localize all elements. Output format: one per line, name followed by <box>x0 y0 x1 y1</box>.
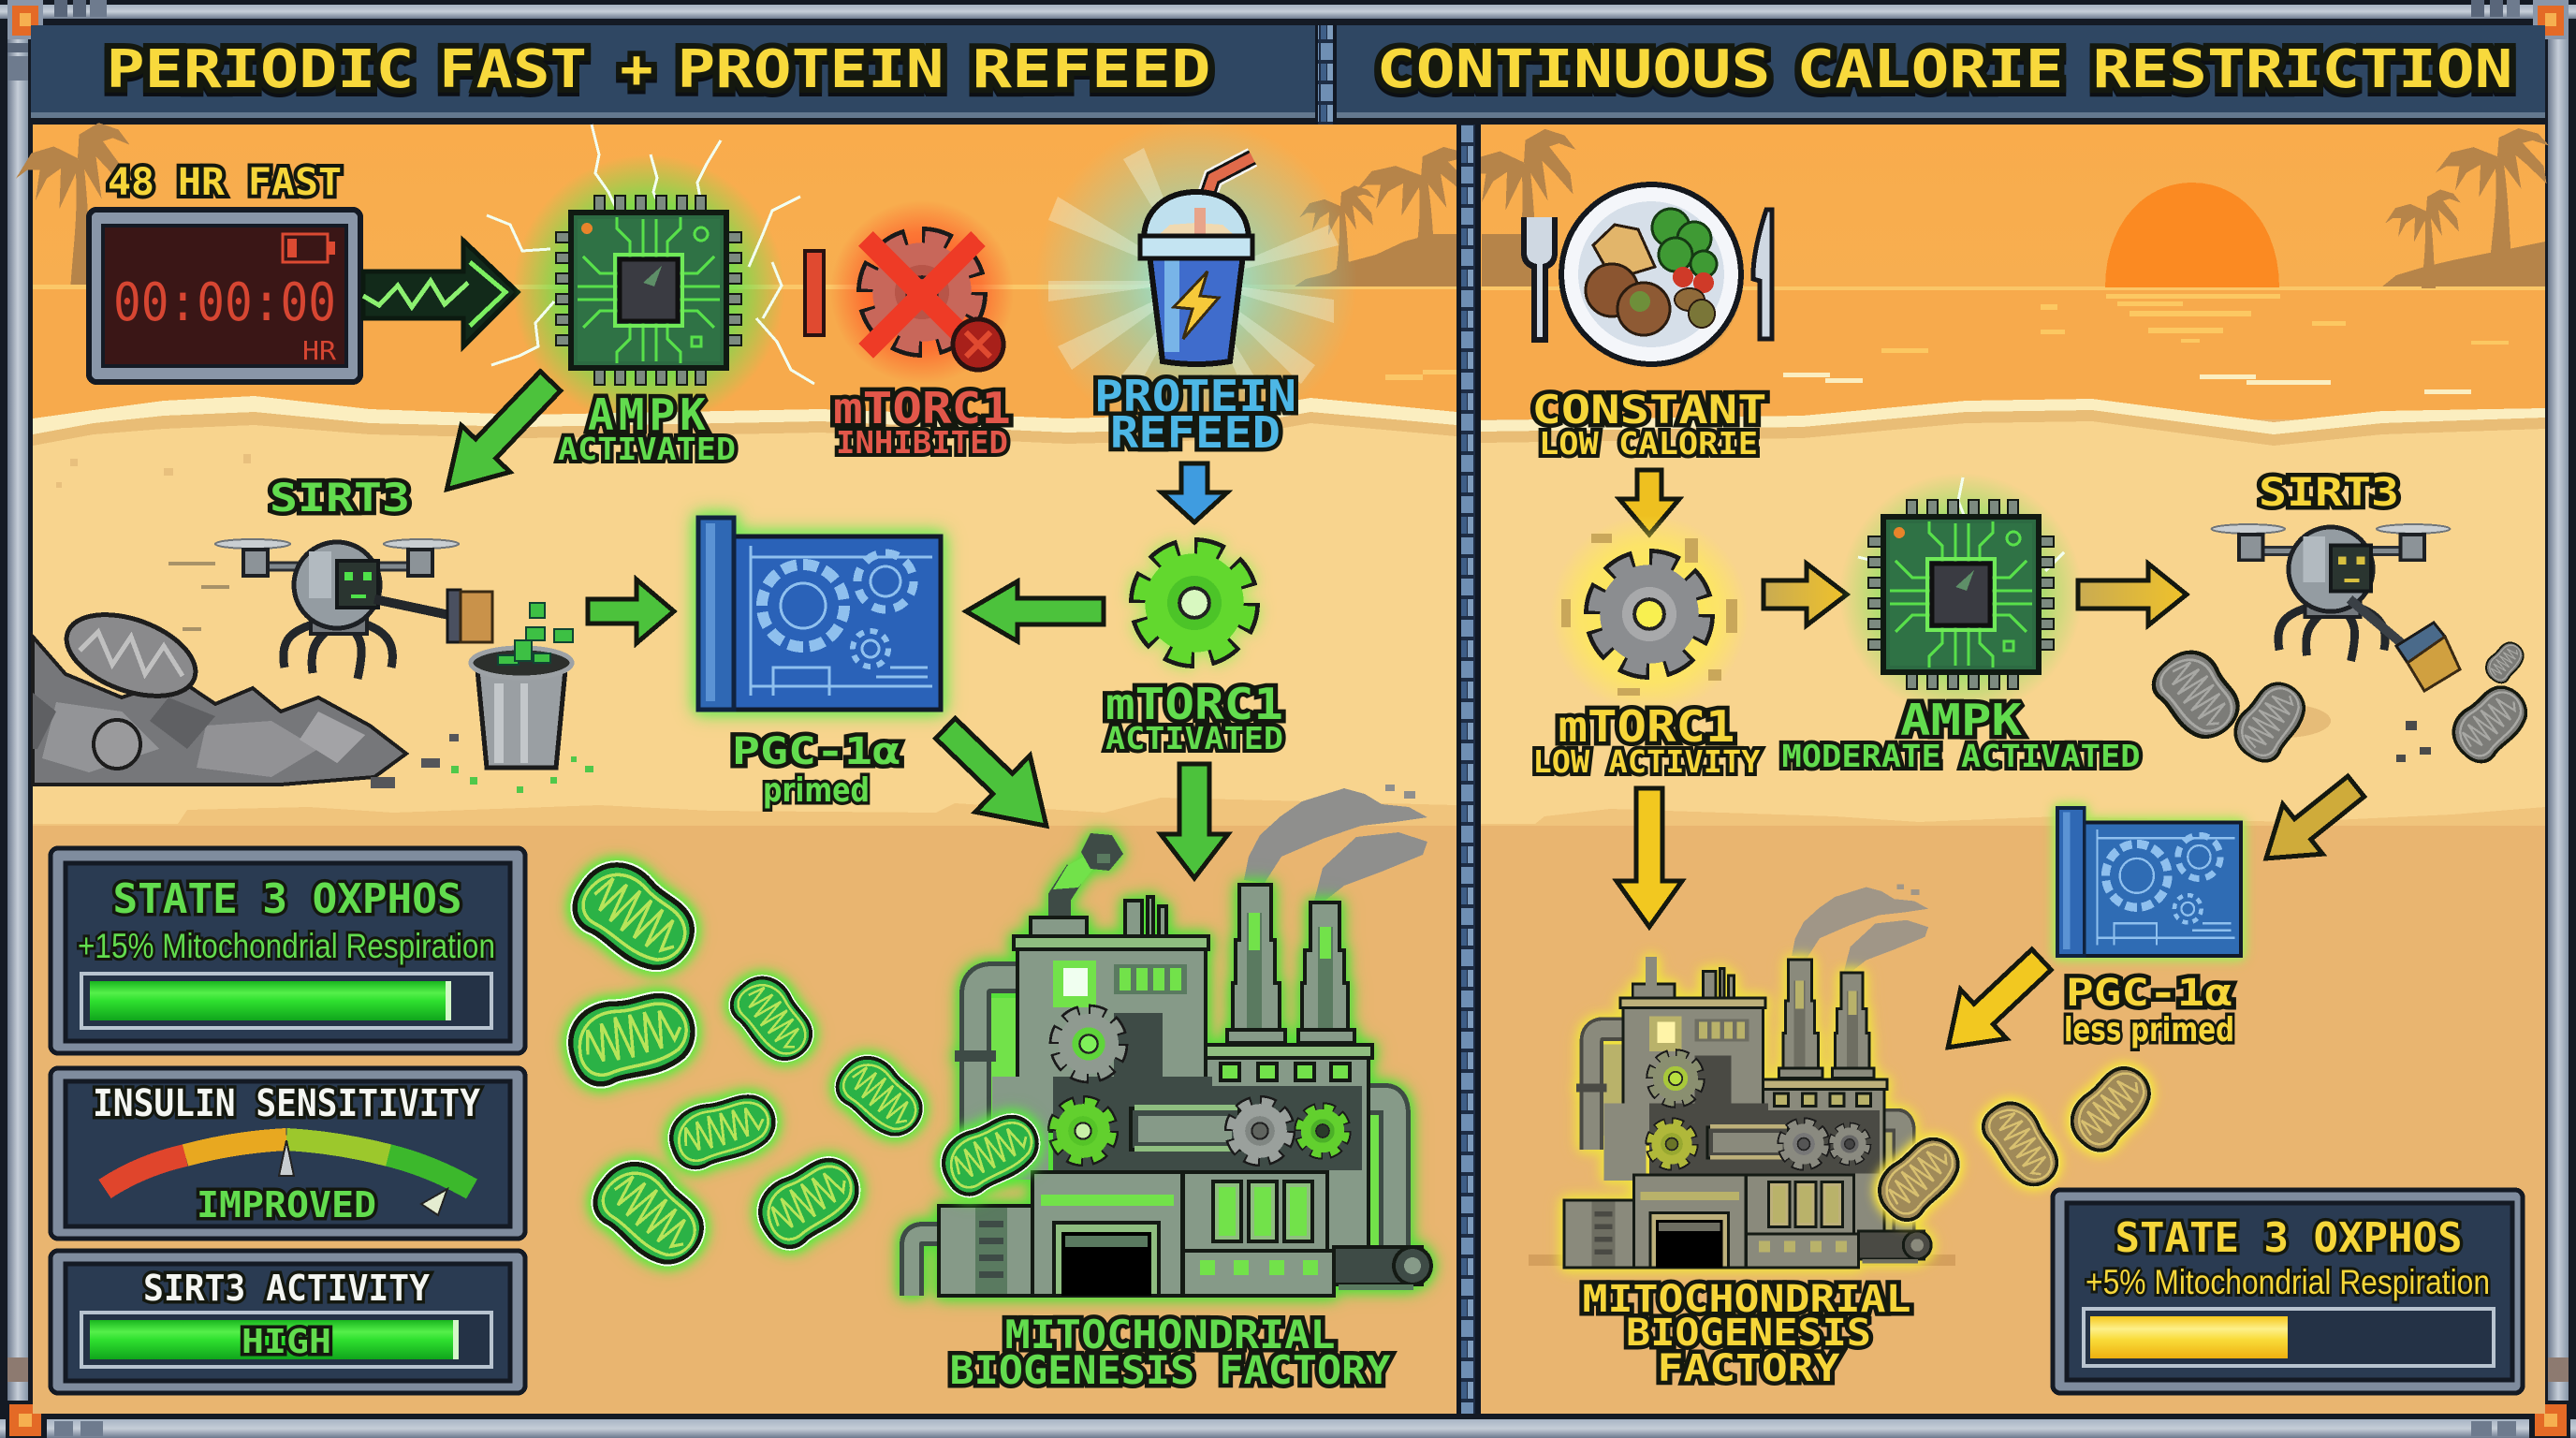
label: PGC-1a primed: primed <box>763 771 870 810</box>
title: right: CALORIE <box>1797 39 2063 100</box>
label: right factory: BIOGENESIS <box>1626 1312 1871 1355</box>
panel: insulin sensitivity: INSULIN SENSITIVITY <box>93 1082 480 1125</box>
label: left factory: MITOCHONDRIAL <box>1005 1312 1335 1357</box>
factory ground shadow <box>1529 1255 1955 1266</box>
title: left: + <box>620 39 653 100</box>
arrow: PGC-1a to factory <box>918 700 1074 854</box>
icon: PGC-1a blueprint <box>698 518 941 710</box>
title: left: REFEED <box>972 39 1211 100</box>
panel: State 3 OXPHOS (left): +15% Mitochondrial Respiration <box>78 927 495 965</box>
icon: PGC-1a blueprint right <box>2057 808 2241 956</box>
rubble with damaged mitochondria <box>33 599 406 785</box>
smoke: left factory <box>1244 785 1427 902</box>
label: PGC-1a less primed <box>2064 972 2234 1049</box>
sun and reflection <box>1783 183 2509 394</box>
label: AMPK moderate activated <box>1782 695 2140 774</box>
icon: mTORC1 inhibited gear <box>830 200 1014 384</box>
icon: trash can <box>371 603 593 793</box>
label: AMPK moderate activated: AMPK <box>1900 695 2022 745</box>
title: left: FAST <box>439 39 587 100</box>
title: right: RESTRICTION <box>2093 39 2512 100</box>
panel: insulin sensitivity <box>51 1068 525 1239</box>
label: right factory: MITOCHONDRIAL <box>1582 1278 1911 1321</box>
panel: right beach background <box>1481 125 2545 1414</box>
label: AMPK moderate activated: MODERATE ACTIVATED <box>1782 738 2140 774</box>
title: right <box>1376 39 2512 100</box>
label: mTORC1 inhibited: mTORC1 <box>833 383 1011 433</box>
panel: SIRT3 activity <box>51 1251 525 1393</box>
icon: AMPK chip activated <box>487 125 814 426</box>
arrow: SIRT3 to PGC-1a <box>588 580 674 643</box>
label: mTORC1 inhibited <box>833 383 1011 461</box>
arrow: mTORC1 to PGC-1a <box>966 581 1104 641</box>
label: PGC-1a less primed: PGC-1α <box>2066 972 2232 1015</box>
icon: countdown timer: 00:00:00 <box>113 272 336 333</box>
label: 48 HR FAST: 48 HR FAST <box>108 161 342 204</box>
panel: left beach background <box>33 125 1456 1414</box>
icon group: damaged mitochondria right <box>2145 637 2536 770</box>
label: AMPK activated: ACTIVATED <box>558 431 736 467</box>
factory vent and inlet pipe <box>912 833 1123 1296</box>
arrow: AMPK to SIRT3 <box>2078 564 2187 625</box>
label: PGC-1a primed <box>732 730 900 810</box>
arrow: mTORC1 to factory (right) <box>1617 788 1682 927</box>
title: left: PERIODIC <box>107 39 414 100</box>
icon: SIRT3 drone cleaning <box>168 539 492 679</box>
label: protein refeed <box>1094 371 1296 458</box>
label: PGC-1a less primed: less primed <box>2064 1011 2234 1049</box>
panel: State 3 OXPHOS (right): +5% Mitochondrial Respiration <box>2086 1263 2490 1301</box>
panel: State 3 OXPHOS (left): STATE 3 OXPHOS <box>112 875 462 923</box>
label: protein refeed: PROTEIN <box>1094 371 1296 421</box>
gauge <box>105 1139 472 1215</box>
arrow: mTORC1 to factory <box>1161 764 1228 878</box>
label: left factory <box>949 1312 1391 1393</box>
label: constant low calorie <box>1531 387 1767 462</box>
panel: SIRT3 activity: SIRT3 ACTIVITY <box>143 1268 430 1309</box>
label: right factory: FACTORY <box>1657 1347 1840 1390</box>
palm: left scene top-left <box>16 123 129 285</box>
icon: SIRT3 drone right <box>2212 524 2460 691</box>
label: AMPK activated <box>558 389 736 467</box>
label: SIRT3: SIRT3 <box>270 475 410 521</box>
header bar <box>31 25 2545 125</box>
icon: right mitochondrial factory <box>1564 957 1931 1268</box>
factory gears: left <box>1055 1012 1345 1159</box>
label: left factory: BIOGENESIS FACTORY <box>949 1347 1391 1393</box>
icon group: green mitochondria <box>562 850 1047 1276</box>
arrow: AMPK to SIRT3 <box>422 358 575 513</box>
panel: State 3 OXPHOS (right): STATE 3 OXPHOS <box>2115 1214 2462 1262</box>
icon: AMPK chip moderate <box>1839 473 2083 716</box>
title: left: PROTEIN <box>678 39 944 100</box>
smoke: right factory <box>1792 884 1928 973</box>
label: constant low calorie: CONSTANT <box>1531 387 1767 433</box>
icon group: brown mitochondria <box>1868 1057 2160 1228</box>
arrow: PGC-1a to factory right <box>1925 935 2065 1072</box>
label: mTORC1 activated: ACTIVATED <box>1105 720 1283 756</box>
panel: State 3 OXPHOS (left) <box>51 848 525 1053</box>
inhibit bar <box>805 251 824 335</box>
panel: State 3 OXPHOS (right) <box>2053 1190 2523 1393</box>
label: mTORC1 low activity: LOW ACTIVITY <box>1533 743 1761 780</box>
label: mTORC1 inhibited: INHIBITED <box>836 424 1008 461</box>
arrow: low calorie to mTORC1 <box>1619 470 1679 535</box>
icon: mTORC1 activated gear <box>1143 551 1246 654</box>
island with palms: right scene top-right <box>2382 128 2550 288</box>
arrow: AMPK/SIRT3 to PGC-1a <box>2247 761 2376 883</box>
icon: left mitochondrial factory <box>912 833 1431 1296</box>
label: mTORC1 activated <box>1105 679 1283 756</box>
label: AMPK activated: AMPK <box>588 389 706 440</box>
label: right factory <box>1582 1278 1911 1390</box>
label: mTORC1 activated: mTORC1 <box>1105 679 1283 729</box>
panel: insulin sensitivity: IMPROVED <box>197 1184 376 1225</box>
icon: plate and cutlery <box>1525 184 1772 367</box>
palm: right scene left <box>1462 129 1576 286</box>
label: SIRT3 right: SIRT3 <box>2259 469 2399 515</box>
label: protein refeed: REFEED <box>1110 407 1281 458</box>
factory gears: right <box>1650 1055 1866 1166</box>
divider between panels <box>1456 125 1481 1414</box>
island with palms: left scene top-right <box>1295 147 1476 286</box>
label: mTORC1 low activity <box>1533 701 1761 780</box>
arrow: timer to AMPK <box>363 241 518 346</box>
label: mTORC1 low activity: mTORC1 <box>1558 701 1735 752</box>
icon: protein shake <box>1035 120 1357 442</box>
label: constant low calorie: LOW CALORIE <box>1539 425 1758 462</box>
arrow: refeed to mTORC1 <box>1162 463 1227 522</box>
panel: SIRT3 activity: HIGH <box>242 1323 331 1361</box>
label: PGC-1a primed: PGC-1α <box>732 730 900 773</box>
icon: mTORC1 low activity gear <box>1550 515 1749 713</box>
title: right: CONTINUOUS <box>1376 39 1771 100</box>
icon: countdown timer: HR <box>302 335 336 366</box>
arrow: mTORC1 to AMPK <box>1764 564 1847 625</box>
title: left <box>107 39 1211 100</box>
icon: countdown timer <box>89 210 360 382</box>
